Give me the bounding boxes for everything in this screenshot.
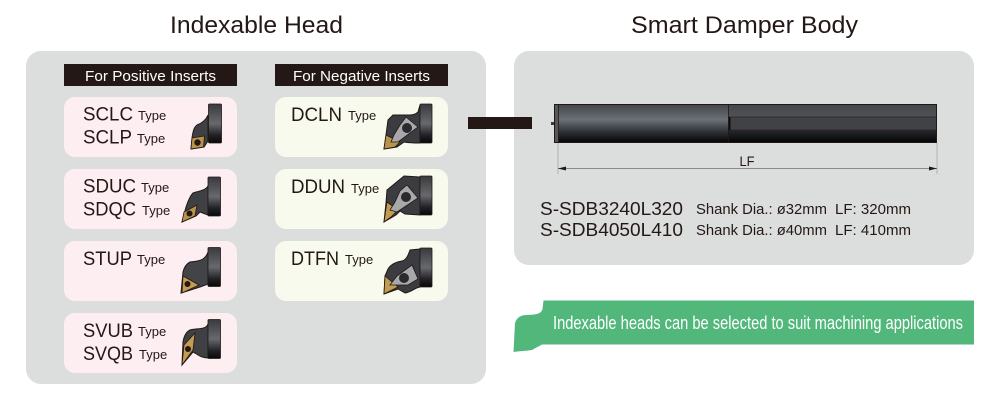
panel: smart damper body [514, 51, 974, 265]
card: DCLN [275, 97, 448, 157]
card: DCLN: DCLN [291, 105, 342, 126]
icon: SVUB tool [182, 320, 220, 365]
card: SDUC / SDQC: Type [141, 180, 169, 195]
spec: S-SDB4050L410: S-SDB4050L410 [540, 219, 683, 240]
spec: S-SDB3240L320: LF: 320mm [835, 202, 911, 218]
damper body bar [551, 104, 936, 143]
card: DDUN: Type [351, 181, 379, 196]
icon: SCLC tool [191, 104, 222, 149]
spec: S-SDB4050L410: Shank Dia.: ø40mm [696, 223, 827, 239]
card: DDUN: DDUN [291, 177, 345, 198]
card: SCLC / SCLP: SCLP [83, 128, 132, 148]
column header: positive inserts: For Positive Inserts [85, 69, 216, 85]
column header: negative inserts [275, 64, 448, 86]
column header: positive inserts [64, 64, 237, 86]
icon: DCLN tool [384, 104, 432, 149]
spec: S-SDB3240L320: S-SDB3240L320 [540, 198, 683, 219]
card: SCLC / SCLP [64, 97, 237, 157]
card: DTFN [275, 241, 448, 301]
dimension: LF [558, 143, 937, 174]
card: DTFN: DTFN [291, 249, 339, 270]
dimension: LF: LF [740, 153, 754, 169]
card: SVUB / SVQB: Type [139, 347, 167, 362]
heading: Indexable Head: Indexable Head [170, 12, 343, 39]
card: STUP: STUP [83, 249, 132, 270]
card: SVUB / SVQB: SVUB [83, 321, 133, 342]
spec: S-SDB4050L410: LF: 410mm [835, 223, 911, 239]
card: STUP [64, 241, 237, 301]
connector bar [468, 117, 532, 129]
card: DTFN: Type [345, 252, 373, 267]
card: SCLC / SCLP: SCLC [83, 104, 133, 126]
card: SDUC / SDQC: Type [142, 203, 170, 218]
spec: S-SDB3240L320 [540, 198, 911, 219]
card: SCLC / SCLP: Type [138, 108, 166, 123]
spec: S-SDB3240L320: Shank Dia.: ø32mm [696, 202, 827, 218]
icon: DTFN tool [384, 248, 432, 294]
card: SDUC / SDQC: SDUC [83, 176, 136, 198]
card: DCLN: Type [348, 108, 376, 123]
icon: DDUN tool [384, 176, 432, 222]
card: SVUB / SVQB: SVQB [83, 344, 133, 365]
icon: STUP tool [181, 248, 220, 293]
card: DDUN [275, 169, 448, 229]
spec: S-SDB4050L410 [540, 219, 911, 240]
card: SCLC / SCLP: Type [137, 131, 165, 146]
card: SVUB / SVQB: Type [138, 324, 166, 339]
column header: negative inserts: For Negative Inserts [293, 69, 430, 85]
heading: Smart Damper Body: Smart Damper Body [631, 12, 858, 39]
panel: indexable head [26, 51, 486, 384]
card: SVUB / SVQB [64, 313, 237, 373]
card: SDUC / SDQC: SDQC [83, 200, 136, 220]
card: SDUC / SDQC [64, 169, 237, 229]
callout banner [514, 300, 974, 352]
card: STUP: Type [137, 252, 165, 267]
icon: SDUC tool [182, 177, 220, 222]
